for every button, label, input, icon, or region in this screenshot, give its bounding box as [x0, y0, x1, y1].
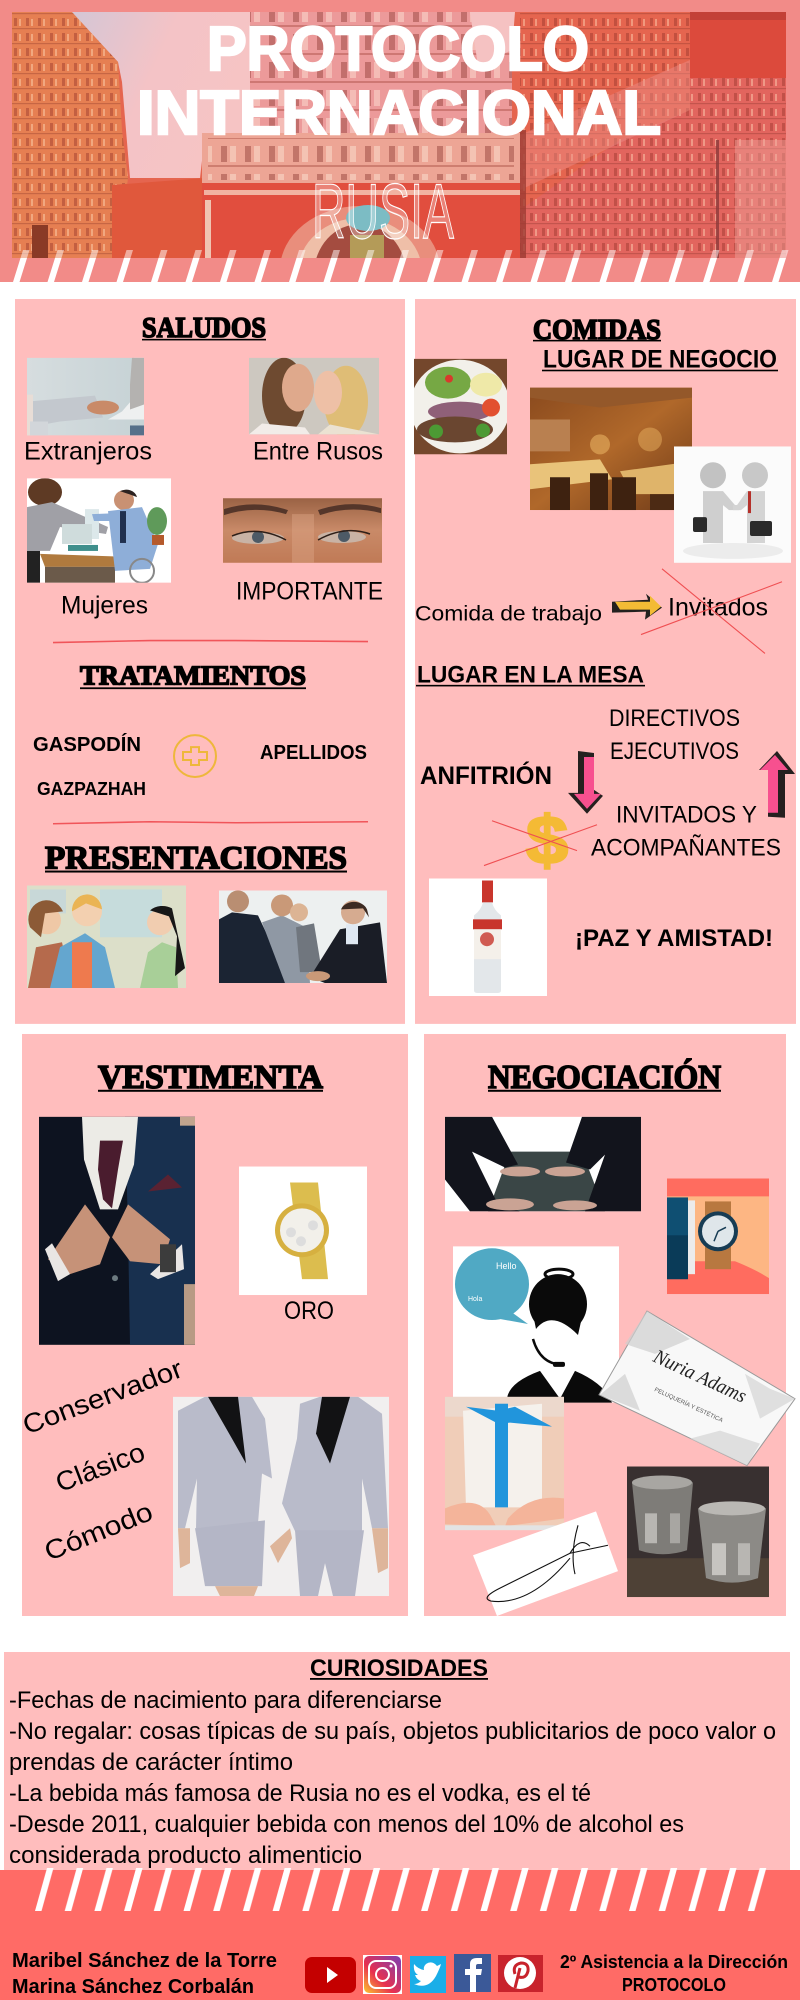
footer band	[0, 1870, 800, 2000]
label: invitados y acompanantes: ACOMPAÑANTES	[591, 835, 781, 862]
icon: dollar sign crossed out	[484, 804, 597, 879]
panel: saludos	[15, 299, 405, 1024]
label: importante: IMPORTANTE	[236, 578, 383, 606]
label: comodo: Cómodo	[40, 1496, 157, 1567]
photo: business card	[599, 1311, 795, 1466]
label: clasico: Clásico	[51, 1437, 149, 1498]
photo: cheek kiss	[249, 358, 379, 434]
heading: tratamientos: TRATAMIENTOS	[80, 660, 306, 691]
label: extranjeros: Extranjeros	[24, 437, 152, 465]
icon: instagram	[363, 1955, 402, 1994]
label: oro: ORO	[284, 1297, 334, 1325]
label: apellidos: APELLIDOS	[260, 742, 367, 764]
label: conservador: Conservador	[19, 1354, 186, 1440]
label: directivos ejecutivos	[609, 705, 740, 765]
panel: curiosidades	[4, 1652, 790, 1870]
text block: curiosities list: prendas de carácter íntimo	[9, 1749, 293, 1776]
panel: vestimenta	[19, 1034, 408, 1616]
label: invitados y acompanantes: INVITADOS Y	[616, 802, 757, 829]
photo: man in suit	[39, 1116, 195, 1345]
header stripes	[13, 250, 789, 282]
footer authors: Maribel Sánchez de la Torre	[12, 1950, 277, 1972]
icon: twitter	[410, 1956, 446, 1993]
panel: negociacion	[424, 1034, 795, 1616]
icon: facebook	[454, 1954, 491, 1992]
title	[137, 15, 661, 148]
photo: handshake	[27, 358, 144, 436]
header image: Moscow street	[12, 12, 786, 258]
photo: eyes	[223, 498, 382, 563]
photo: vodka glasses	[627, 1466, 769, 1598]
panel: comidas	[410, 299, 796, 1024]
photo: gold watch	[239, 1166, 367, 1295]
subheading: lugar de negocio: LUGAR DE NEGOCIO	[543, 346, 777, 374]
title: PROTOCOLO	[207, 15, 589, 84]
photo: vodka bottle	[429, 878, 547, 996]
photo: gift in hands	[445, 1396, 564, 1530]
footer course info: 2º Asistencia a la Dirección	[560, 1952, 788, 1972]
footer authors	[12, 1950, 277, 1998]
photo: signature	[473, 1511, 618, 1616]
text block: curiosities list: -La bebida más famosa de Rusia no es el vodka, es el té	[9, 1780, 591, 1807]
icon: dollar sign crossed out: $	[526, 804, 568, 879]
footer course info: PROTOCOLO	[622, 1975, 726, 1995]
header background	[0, 0, 800, 282]
title: INTERNACIONAL	[137, 79, 661, 148]
illustration: interpreter with headset	[453, 1246, 619, 1403]
photo: shaking hands at desk	[27, 478, 171, 583]
label: gaspodin: GASPODÍN	[33, 733, 141, 756]
subheading: lugar en la mesa: LUGAR EN LA MESA	[417, 661, 644, 688]
icon: pinterest	[498, 1955, 543, 1992]
label: directivos ejecutivos: EJECUTIVOS	[610, 738, 739, 765]
photo: business card: Nuria Adams	[649, 1345, 750, 1408]
footer stripes	[35, 1868, 770, 1911]
label: anfitrion: ANFITRIÓN	[420, 760, 552, 790]
illustration: interpreter with headset: Hello	[496, 1261, 516, 1271]
footer course info	[560, 1952, 788, 1995]
subtitle: Rusia: RUSIA	[312, 167, 454, 255]
label: invitados crossed out	[641, 569, 782, 653]
label: comida de trabajo: Comida de trabajo	[415, 603, 602, 626]
illustration: watch on wrist	[667, 1178, 769, 1294]
photo: business card: PELUQUERÍA Y ESTÉTICA	[653, 1386, 724, 1424]
label: paz y amistad: ¡PAZ Y AMISTAD!	[575, 925, 773, 952]
icon: right arrow	[612, 594, 662, 620]
heading: vestimenta: VESTIMENTA	[98, 1059, 323, 1096]
footer authors: Marina Sánchez Corbalán	[12, 1976, 254, 1998]
heading: presentaciones: PRESENTACIONES	[45, 841, 347, 877]
icon: youtube	[305, 1957, 356, 1993]
label: entre rusos: Entre Rusos	[253, 437, 383, 465]
photo: salad plate	[414, 358, 507, 454]
text block: curiosities list: -No regalar: cosas típicas de su país, objetos publicitarios de poco valor o	[9, 1718, 776, 1745]
heading: negociacion: NEGOCIACIÓN	[488, 1058, 721, 1096]
photo: 3d men handshake	[674, 446, 791, 563]
icon: plus in circle	[174, 735, 216, 777]
label: invitados y acompanantes	[591, 802, 781, 862]
photo: business introductions	[219, 890, 387, 983]
label: mujeres: Mujeres	[61, 592, 148, 620]
heading: comidas: COMIDAS	[533, 314, 661, 346]
heading: curiosidades: CURIOSIDADES	[310, 1655, 488, 1682]
illustration: interpreter with headset: Hola	[468, 1296, 482, 1303]
label: gazpazhah: GAZPAZHAH	[37, 779, 146, 800]
illustration: three people talking	[27, 886, 186, 988]
icon: up arrow	[759, 751, 795, 818]
heading: saludos: SALUDOS	[142, 312, 266, 344]
text block: curiosities list: -Fechas de nacimiento para diferenciarse	[9, 1687, 442, 1714]
photo: women in grey suits	[173, 1396, 389, 1596]
photo: hands on table	[445, 1116, 641, 1212]
icon: down arrow	[568, 751, 603, 814]
text block: curiosities list	[9, 1687, 776, 1869]
label: invitados crossed out: Invitados	[668, 594, 768, 622]
label: directivos ejecutivos: DIRECTIVOS	[609, 705, 740, 732]
text block: curiosities list: -Desde 2011, cualquier bebida con menos del 10% de alcohol es	[9, 1811, 684, 1838]
text block: curiosities list: considerada producto alimenticio	[9, 1842, 362, 1869]
photo: restaurant interior	[530, 388, 692, 510]
